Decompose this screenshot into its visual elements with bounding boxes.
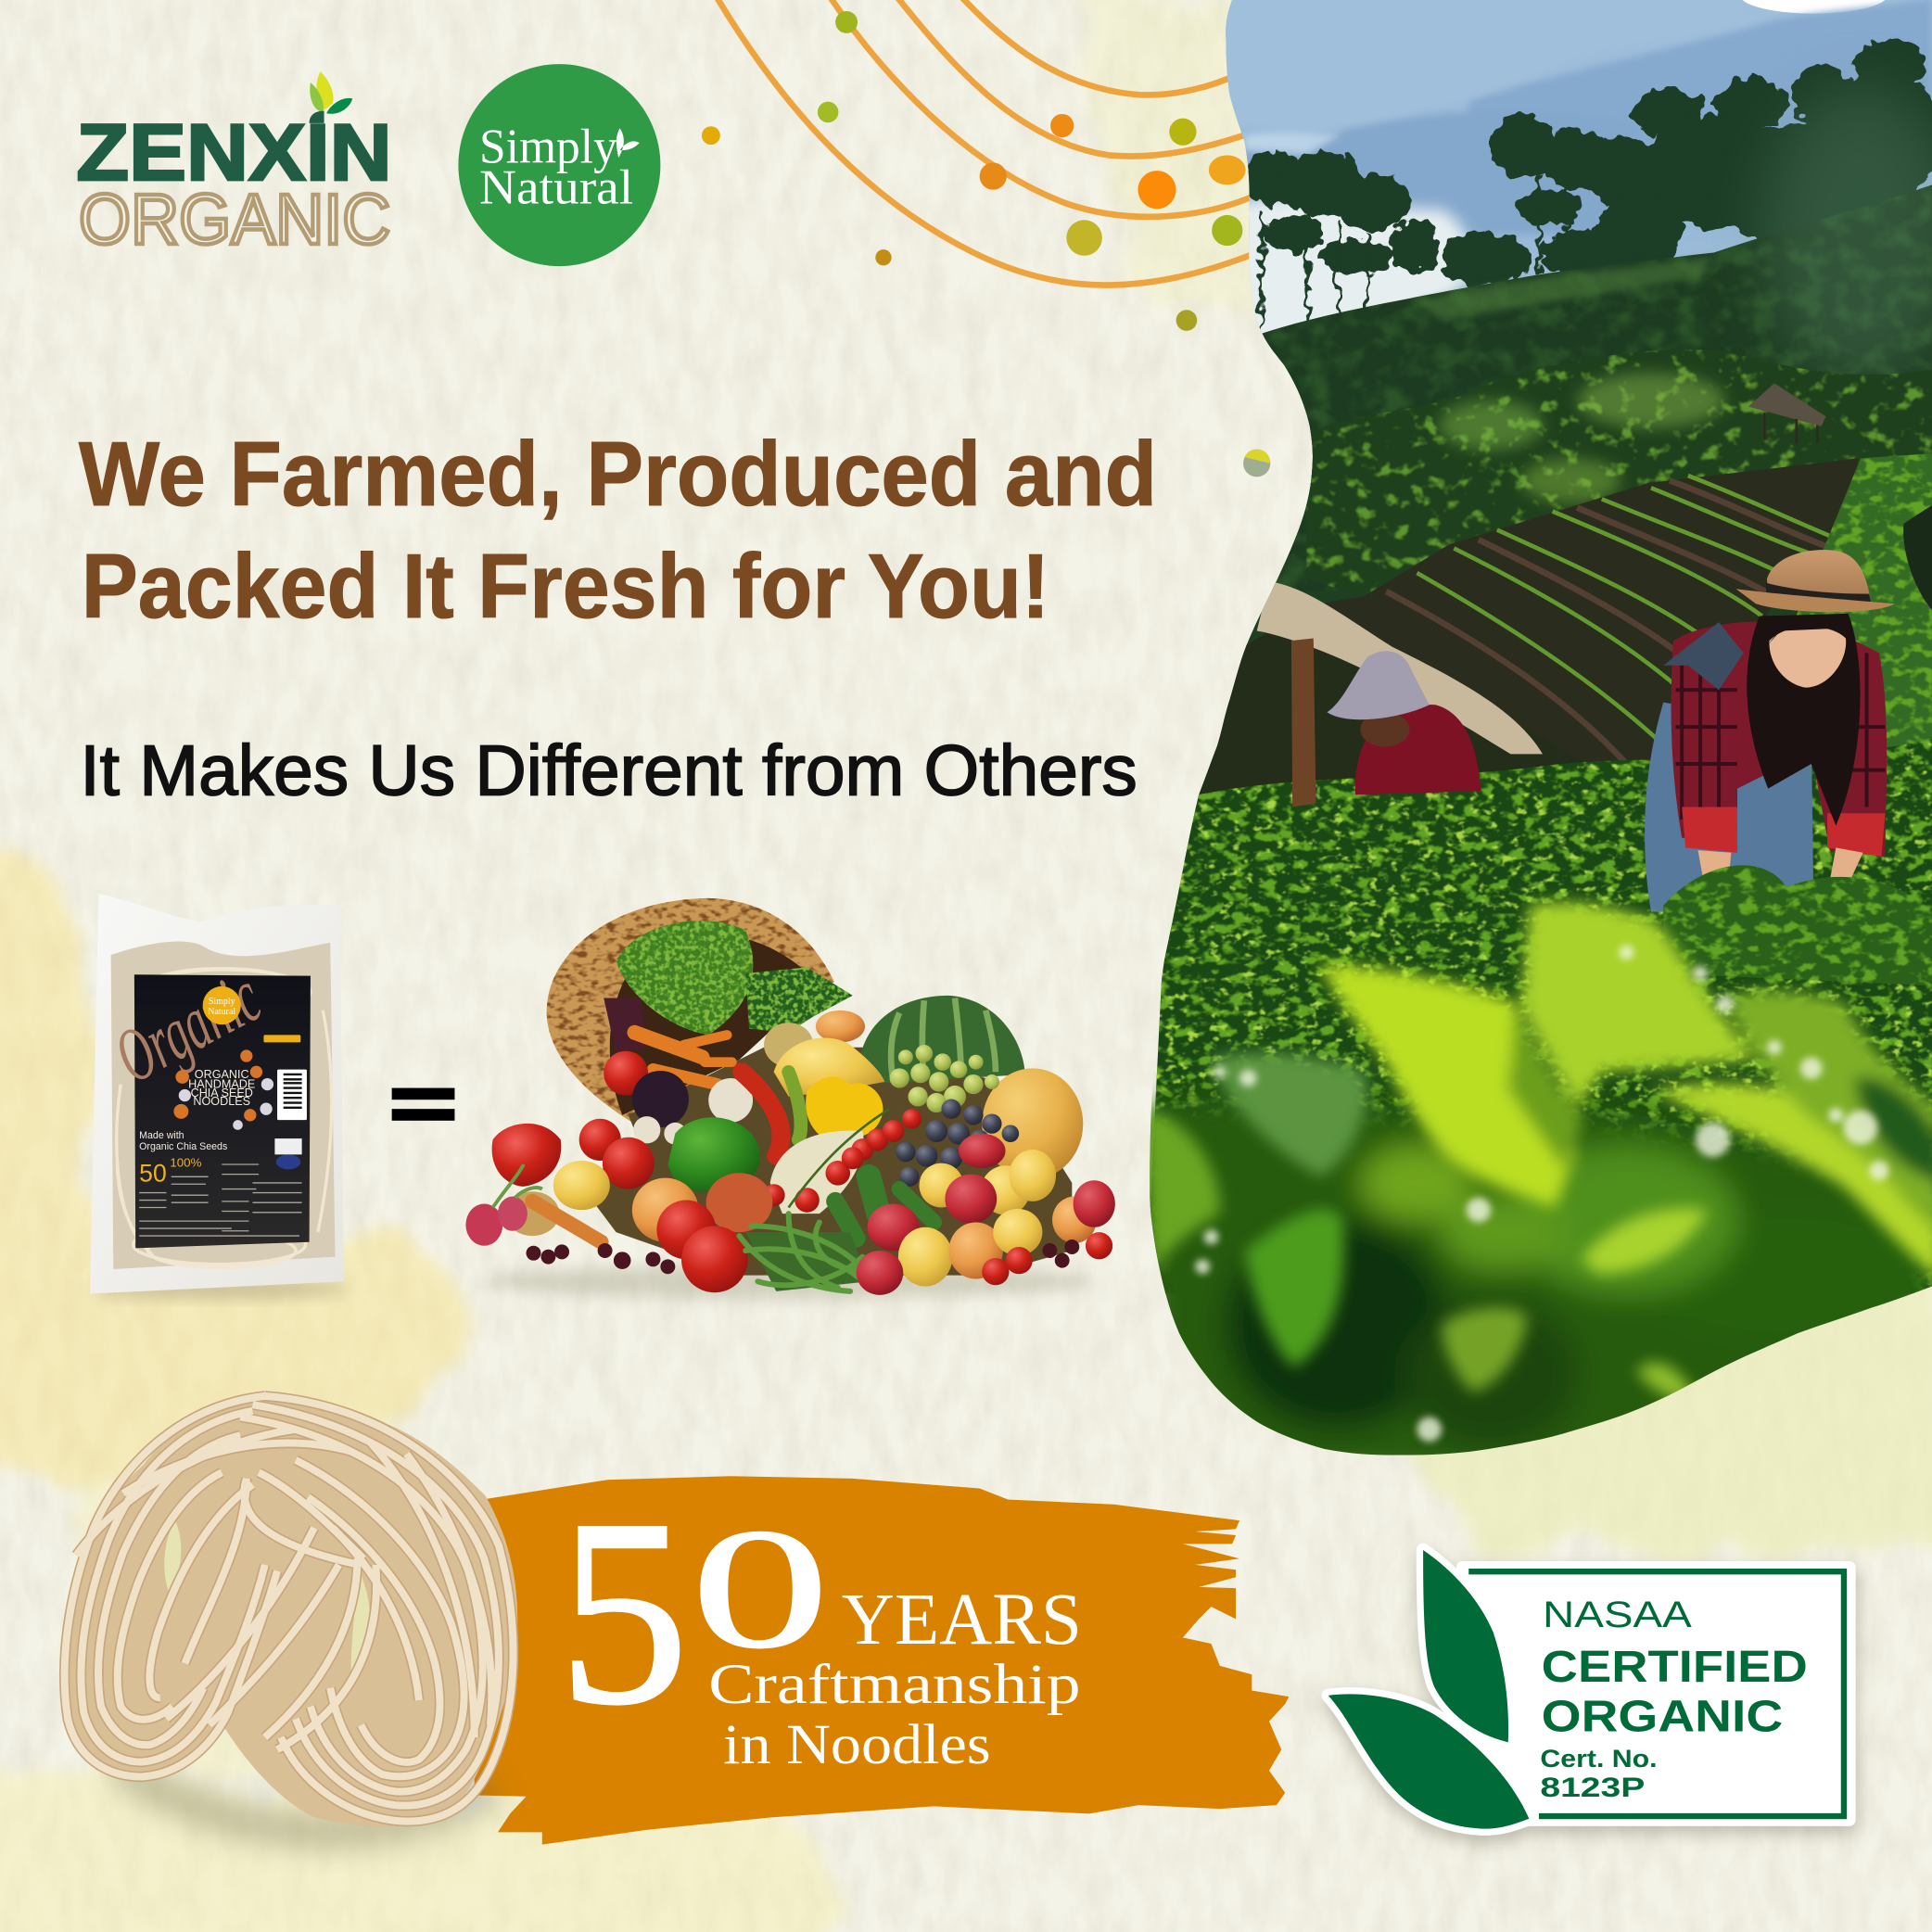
cauliflower <box>770 1131 864 1214</box>
thatched hut <box>1748 383 1826 443</box>
carrot <box>532 1201 602 1242</box>
basket of fruit and vegetables <box>465 898 1115 1299</box>
strawberry field <box>1146 739 1932 1294</box>
label fine print <box>139 1164 302 1236</box>
noodle strands <box>65 1396 514 1822</box>
product name: CHIA SEED <box>191 1087 253 1099</box>
forested hillside <box>1257 86 1932 591</box>
subheading: It Makes Us Different from Others <box>80 731 1138 810</box>
farm landscape photo <box>1143 0 1932 1479</box>
vegan tag <box>263 1035 300 1042</box>
script word: Organic <box>101 954 273 1099</box>
cucumbers <box>835 1176 934 1239</box>
50 years craftsmanship text: YEARS <box>842 1579 1082 1660</box>
made with caption: Organic Chia Seeds <box>139 1141 227 1152</box>
foreground broad foliage tones <box>1146 1095 1932 1479</box>
green bell pepper <box>667 1117 760 1192</box>
watermelon <box>860 996 1025 1085</box>
plastic tunnel <box>1257 581 1543 754</box>
logo: Zenxin Organic <box>76 71 392 260</box>
badge text: CERTIFIED <box>1542 1643 1808 1692</box>
badge text: ORGANIC <box>1542 1692 1783 1741</box>
pears and apples <box>764 1010 884 1097</box>
badge text: Cert. No. <box>1540 1745 1658 1773</box>
badge text: 8123P <box>1540 1773 1645 1803</box>
left farmer <box>1327 651 1481 794</box>
yellow brand badge: Simply <box>209 997 235 1007</box>
barcode <box>277 1070 307 1120</box>
red tomato in basket <box>604 1051 648 1096</box>
bokeh highlights <box>1195 945 1888 1442</box>
50 years claim <box>139 1156 202 1188</box>
50 years craftsmanship text: in Noodles <box>723 1714 991 1776</box>
inner noodle window <box>111 941 336 1269</box>
eggplant <box>632 1071 689 1127</box>
logo subline: ORGANIC <box>79 180 390 260</box>
50 years craftsmanship text <box>558 1465 1082 1776</box>
main heading: We Farmed, Produced and <box>79 423 1157 525</box>
50 years craftsmanship text: 0 <box>692 1493 829 1684</box>
noodle silhouette <box>61 1393 517 1827</box>
logo leaves <box>310 71 352 123</box>
yellow pepper <box>806 1076 883 1139</box>
parsley and greens <box>604 921 853 1053</box>
base behind slopes <box>1185 358 1799 862</box>
pile base <box>579 1048 1072 1276</box>
product name: HANDMADE <box>188 1078 255 1091</box>
right farmer in hat <box>1645 550 1895 912</box>
made with caption: Made with <box>139 1130 184 1141</box>
product name: NOODLES <box>193 1095 250 1108</box>
50 years craftsmanship text: Craftmanship <box>708 1654 1081 1716</box>
main heading <box>79 423 1157 637</box>
equals sign <box>392 1088 454 1121</box>
product name <box>188 1068 255 1108</box>
noodle nest <box>61 1393 517 1831</box>
ground shadow <box>480 1265 1097 1299</box>
noodle product package <box>90 894 349 1299</box>
salad tomatoes <box>579 1119 655 1189</box>
sunlit mid-slope vegetation <box>1306 350 1932 596</box>
green grapes <box>890 1045 999 1112</box>
NASAA certified organic badge <box>1328 1550 1856 1829</box>
decorative coloured dots <box>702 11 1270 477</box>
pine trees <box>1246 40 1932 338</box>
lower leaf <box>1328 1694 1529 1829</box>
large red pepper <box>492 1124 561 1187</box>
melon <box>982 1068 1083 1179</box>
50 years craftsmanship text: 5 <box>558 1465 689 1760</box>
upper leaf <box>1423 1550 1508 1742</box>
yellow brand badge: Natural <box>208 1007 235 1017</box>
orange brush banner <box>475 1476 1289 1845</box>
cherries <box>527 1239 1079 1274</box>
chilli peppers <box>742 1072 801 1156</box>
logo: Simply Natural <box>458 64 660 266</box>
badge text <box>1540 1595 1808 1803</box>
certification marks <box>274 1138 302 1169</box>
gaps between the strands <box>164 1520 370 1688</box>
sky and mountains <box>1146 0 1932 862</box>
plastic bag <box>90 894 344 1294</box>
mid-ground leaves in front of farmers <box>1663 865 1932 985</box>
foreground blurred leaves <box>1143 902 1932 1407</box>
peppers, apples and peaches <box>505 1161 772 1292</box>
green border <box>1468 1571 1844 1816</box>
50 years claim: 50 <box>139 1160 167 1188</box>
yellow brand badge <box>203 986 241 1024</box>
logo: Simply Natural: Natural <box>479 160 633 214</box>
wicker basket <box>547 898 834 1124</box>
wooden post <box>1291 638 1316 807</box>
logo: Simply Natural: Simply <box>479 120 617 173</box>
made with caption <box>139 1130 227 1152</box>
dark grapes <box>896 1099 1019 1187</box>
green beans <box>745 1232 869 1291</box>
white sticker base <box>1328 1550 1856 1829</box>
logo wordmark: ZENXIN <box>76 108 392 197</box>
mist behind the pines <box>1249 197 1473 334</box>
decorative orange curved lines <box>715 0 1257 286</box>
50 years claim: 100% <box>170 1156 202 1170</box>
main heading: Packed It Fresh for You! <box>82 535 1049 637</box>
radishes <box>465 1164 542 1246</box>
product name: ORGANIC <box>195 1068 249 1081</box>
chia seed accents <box>173 1049 262 1121</box>
mushrooms <box>633 1078 753 1145</box>
cherry tomatoes on the vine <box>763 1109 922 1213</box>
badge text: NASAA <box>1543 1595 1692 1635</box>
yellow apricots and red plums <box>857 1134 1115 1295</box>
black label <box>134 974 311 1248</box>
terraced rows <box>1183 453 1932 862</box>
carrots <box>634 1033 731 1085</box>
